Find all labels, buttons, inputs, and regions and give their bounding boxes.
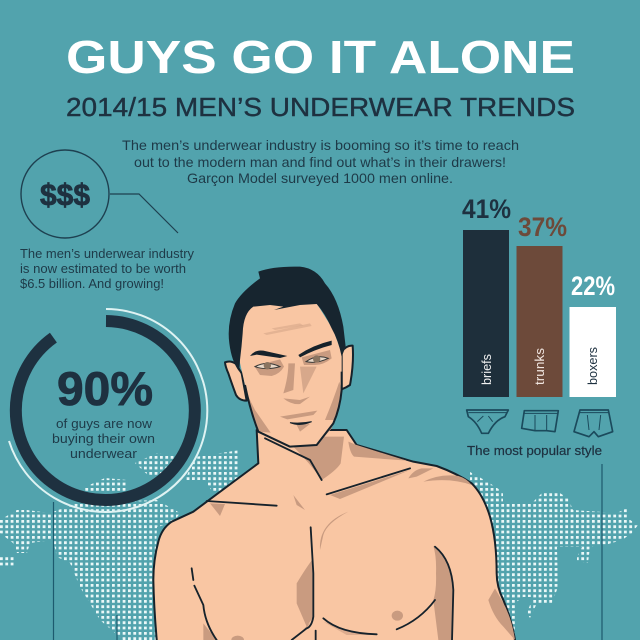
intro paragraph: The men’s underwear industry is booming so it’s time to reach [122,137,519,153]
icons: underwear styles [467,410,613,437]
man illustration [153,267,520,640]
intro paragraph: Garçon Model surveyed 1000 men online. [187,170,453,186]
bar: trunks: trunks [532,347,547,385]
eyebrows and lip line [250,341,332,424]
90 percent ring: 90% [57,362,153,415]
bar chart: popular styles [462,194,616,397]
dotted world map [0,452,640,639]
money callout: $$$ [40,177,90,212]
money callout [20,150,195,291]
money callout: $6.5 billion. And growing! [20,277,164,291]
head [225,267,353,447]
face [239,303,342,447]
right ear [342,346,353,389]
bar: briefs: 41% [462,194,511,224]
vertical guide lines [54,464,602,640]
icon: briefs [467,410,508,433]
intro paragraph: out to the modern man and find out what’s in their drawers! [134,154,506,170]
eyes [255,355,328,369]
money callout: is now estimated to be worth [20,262,186,276]
icon: trunks [522,411,558,432]
bar: boxers: 22% [571,271,615,301]
torso [153,430,520,640]
90 percent ring: of guys are now [56,416,153,431]
jaw outline [245,372,342,447]
90 percent ring: buying their own [52,431,155,446]
icon: boxers [574,410,613,437]
bar: briefs: briefs [479,354,494,385]
bar: trunks [516,212,567,397]
bar: boxers [570,271,616,397]
left ear [225,361,247,401]
90 percent ring: underwear [70,446,138,461]
money callout: The men’s underwear industry [20,247,195,261]
bar: briefs [462,194,511,397]
subtitle: 2014/15 MEN’S UNDERWEAR TRENDS [66,92,575,122]
facial shading [247,323,342,445]
title: GUYS GO IT ALONE [66,31,575,83]
bar: boxers: boxers [585,347,600,385]
90 percent ring [9,309,207,512]
bar: trunks: 37% [518,212,567,242]
intro paragraph [122,137,519,186]
caption: most popular style: The most popular style [467,443,602,458]
hair [229,267,346,372]
